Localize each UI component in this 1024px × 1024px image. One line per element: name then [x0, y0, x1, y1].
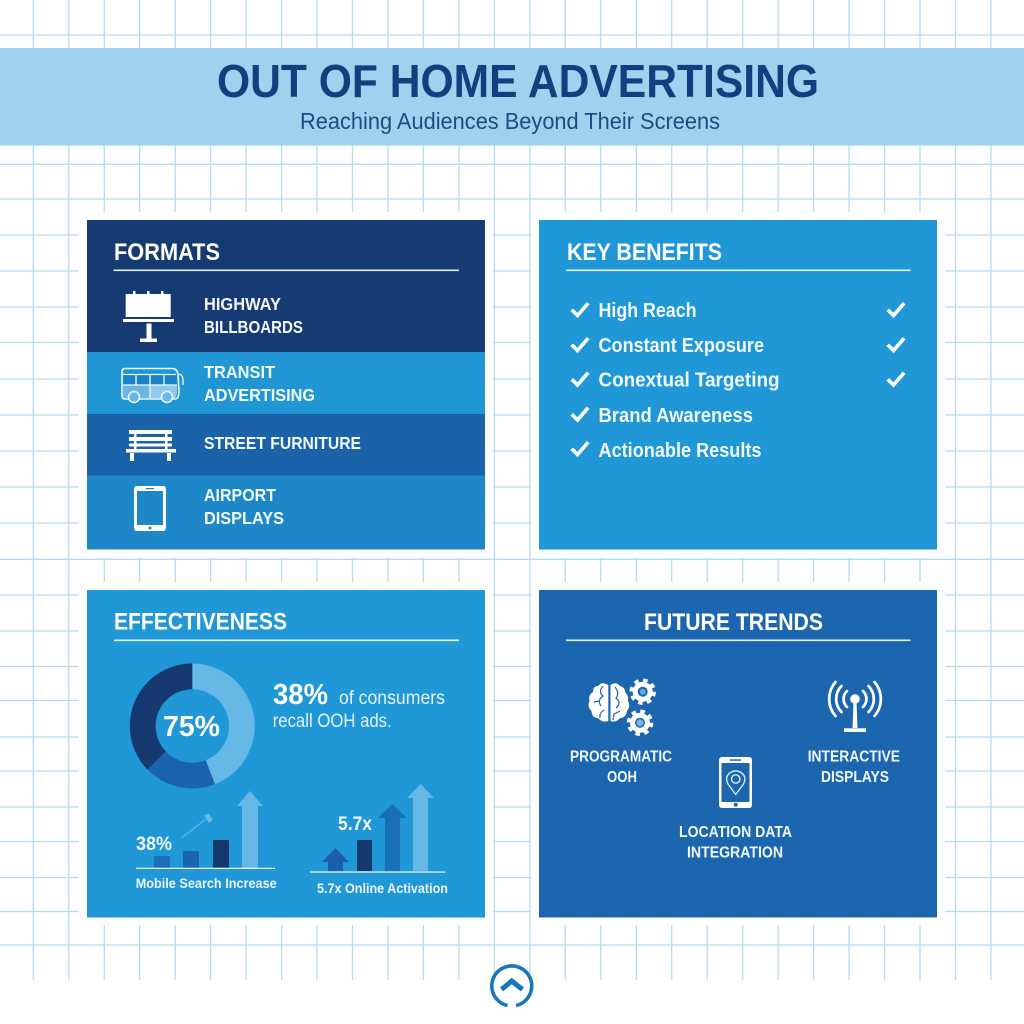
chart: online activation: 5.7x Online Activation	[317, 881, 448, 896]
donut chart	[130, 663, 255, 788]
footer logo	[492, 966, 532, 1006]
icon: antenna	[829, 682, 881, 732]
label: highway billboards: BILLBOARDS	[204, 317, 303, 337]
stat: consumer recall: 38%	[273, 679, 328, 711]
label: programatic ooh: PROGRAMATIC	[570, 749, 672, 766]
heading: key benefits: KEY BENEFITS	[567, 239, 722, 266]
label: transit advertising: ADVERTISING	[204, 385, 315, 405]
benefit: constant exposure: Constant Exposure	[598, 335, 764, 357]
benefit: high reach: High Reach	[598, 300, 696, 322]
donut value: 75%	[163, 711, 220, 743]
panel: effectiveness	[87, 590, 485, 918]
heading: future trends: FUTURE TRENDS	[644, 609, 823, 636]
label: interactive displays	[808, 749, 900, 786]
chart: mobile search increase	[136, 791, 277, 891]
label: airport displays	[204, 485, 284, 528]
benefit: brand awareness: Brand Awareness	[598, 405, 753, 427]
label: highway billboards: HIGHWAY	[204, 294, 281, 314]
icon: phone with location pin	[719, 757, 752, 808]
label: airport displays: DISPLAYS	[204, 508, 284, 528]
icon: billboard	[123, 291, 174, 342]
label: location data integration: LOCATION DATA	[679, 824, 792, 841]
benefit: contextual targeting: Conextual Targeting	[598, 370, 780, 392]
label: transit advertising: TRANSIT	[204, 362, 275, 382]
icon: brain and gears	[589, 680, 654, 734]
label: programatic ooh: OOH	[607, 769, 637, 786]
chart: mobile search increase: Mobile Search Increase	[136, 876, 277, 891]
chart: online activation	[310, 784, 448, 896]
icon: bus	[122, 368, 183, 402]
label: location data integration	[679, 824, 792, 862]
label: programatic ooh	[570, 749, 672, 786]
icon: bench	[126, 430, 176, 461]
stat: consumer recall: recall OOH ads.	[273, 711, 392, 732]
stat: consumer recall: of consumers	[339, 688, 445, 709]
icon: tablet	[134, 486, 166, 531]
heading: effectiveness: EFFECTIVENESS	[114, 608, 287, 636]
label: highway billboards	[204, 294, 303, 337]
heading: formats: FORMATS	[114, 239, 220, 266]
chart: online activation: 5.7x	[338, 813, 372, 835]
panel: future trends	[539, 590, 937, 918]
chart: mobile search increase: 38%	[136, 834, 172, 855]
title: OUT OF HOME ADVERTISING	[217, 55, 819, 107]
right-hand check marks	[889, 304, 903, 385]
title banner	[0, 48, 1024, 146]
label: airport displays: AIRPORT	[204, 485, 276, 505]
panel: key benefits	[539, 220, 937, 550]
label: interactive displays: DISPLAYS	[821, 769, 889, 786]
subtitle: Reaching Audiences Beyond Their Screens	[300, 108, 720, 134]
label: transit advertising	[204, 362, 315, 405]
label: interactive displays: INTERACTIVE	[808, 749, 900, 766]
panel: formats	[87, 220, 485, 550]
label: street furniture: STREET FURNITURE	[204, 433, 361, 453]
label: location data integration: INTEGRATION	[687, 845, 783, 862]
benefit: actionable results: Actionable Results	[598, 440, 762, 462]
stat: consumer recall	[273, 679, 445, 732]
